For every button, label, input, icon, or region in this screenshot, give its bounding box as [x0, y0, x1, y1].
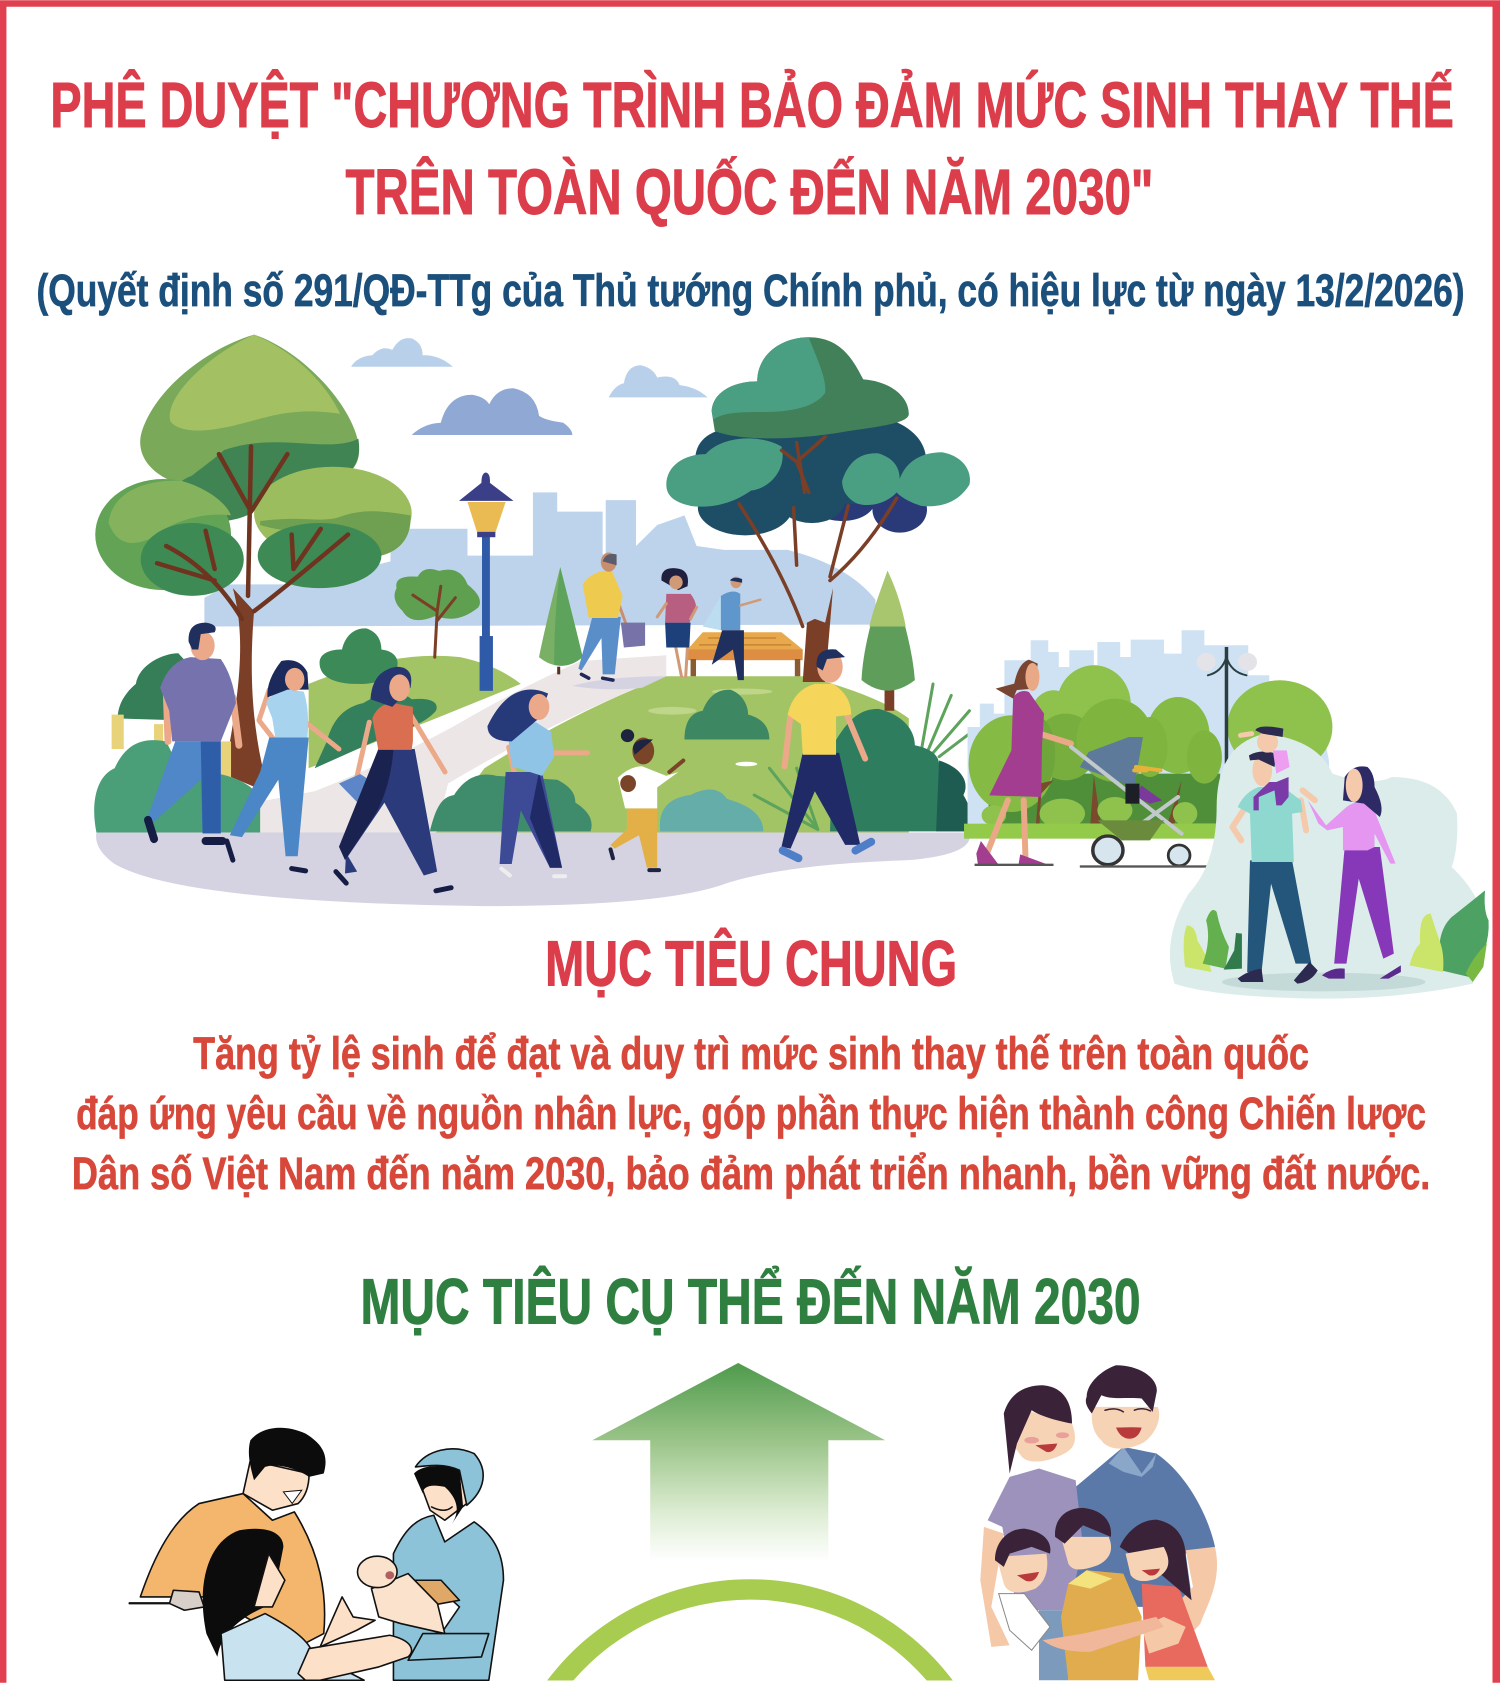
walker: woman in blue [487, 690, 588, 876]
family background blob [1170, 734, 1487, 999]
small tree [395, 569, 480, 657]
left tree [95, 335, 412, 793]
double lamp [1197, 647, 1257, 764]
bench [688, 632, 803, 676]
father [129, 1428, 326, 1647]
illustration: happy family [980, 1365, 1217, 1680]
second skyline [968, 630, 1331, 827]
ground shadow [1222, 973, 1425, 991]
park trees [964, 665, 1332, 839]
clouds [351, 338, 708, 435]
title: TRÊN TOÀN QUỐC ĐẾN NĂM 2030" [345, 155, 1153, 228]
cypress trees [539, 567, 915, 711]
father in blue shirt [1076, 1365, 1217, 1649]
illustration: park scene [94, 335, 971, 906]
green arc [547, 1579, 953, 1681]
general goal paragraph [72, 1028, 1430, 1199]
title [50, 68, 1454, 228]
background walkers [578, 553, 760, 680]
nurse [393, 1449, 503, 1680]
right tree [666, 337, 970, 682]
woman in pink [1303, 766, 1401, 979]
skyline [204, 492, 875, 626]
arrow up [592, 1363, 885, 1561]
illustration: parents and nurse with baby [129, 1428, 503, 1680]
heading: general goal: MỤC TIÊU CHUNG [545, 926, 957, 999]
walker: woman in orange with bag [336, 667, 451, 891]
hills and path [230, 655, 909, 833]
mother [203, 1529, 412, 1680]
stroller [1071, 737, 1208, 868]
bushes [94, 628, 971, 833]
man carrying child [1232, 727, 1318, 984]
walker: man in yellow [781, 649, 871, 858]
boy in white [995, 1529, 1050, 1650]
foreground leaves [1184, 890, 1489, 982]
walker: man in purple [148, 623, 239, 841]
baby [357, 1556, 459, 1634]
ground [96, 833, 970, 906]
street lamp [459, 472, 514, 691]
illustration: woman with stroller and family [964, 630, 1489, 999]
walker: woman in light blue [227, 660, 339, 871]
boy in yellow [1043, 1508, 1164, 1680]
mother in purple shirt [980, 1385, 1083, 1680]
walker: child [611, 729, 683, 870]
girl [1120, 1520, 1215, 1680]
heading: specific goals to 2030: MỤC TIÊU CỤ THỂ ĐẾN NĂM 2030 [361, 1264, 1141, 1337]
woman with purple dress [975, 660, 1071, 866]
